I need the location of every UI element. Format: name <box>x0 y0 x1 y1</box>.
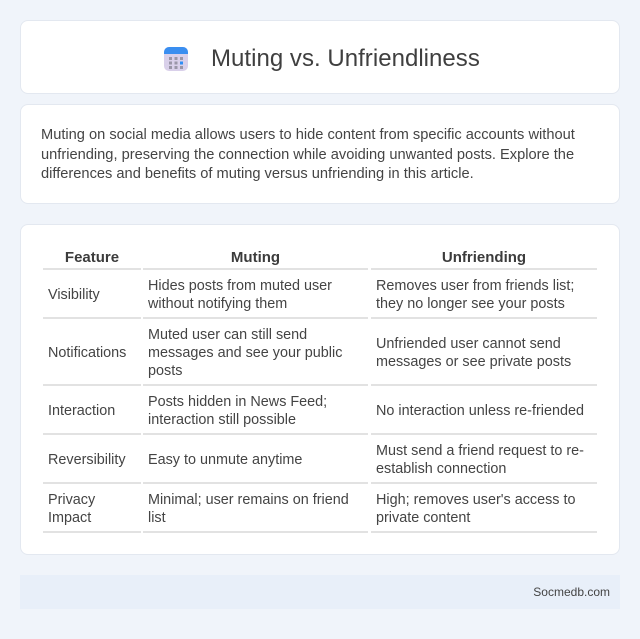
footer <box>20 575 620 609</box>
row: notifications: messages or see private posts <box>376 354 571 370</box>
row: notifications: posts <box>148 363 182 379</box>
intro text: unfriending, preserving the connection while avoiding unwanted posts. Explore the <box>41 146 574 162</box>
row: reversibility: establish connection <box>376 461 506 477</box>
panel: comparison table <box>20 224 620 555</box>
row: privacy impact: Minimal; user remains on friend <box>148 492 349 508</box>
table header: Unfriending <box>442 249 526 266</box>
table header <box>65 249 526 266</box>
row: notifications <box>43 317 597 379</box>
table header: Muting <box>231 249 280 266</box>
row: interaction: Posts hidden in News Feed; <box>148 394 327 410</box>
panel: title card <box>20 20 620 94</box>
row: notifications: Unfriended user cannot send <box>376 336 561 352</box>
row: privacy impact <box>43 482 597 533</box>
row: visibility: without notifying them <box>148 296 287 312</box>
row: visibility: Removes user from friends list; <box>376 278 574 294</box>
row: visibility: they no longer see your posts <box>376 296 565 312</box>
row: notifications: messages and see your public <box>148 345 342 361</box>
title: Muting vs. Unfriendliness <box>211 45 480 72</box>
intro text <box>41 127 575 182</box>
row: privacy impact: list <box>148 510 166 526</box>
intro text: Muting on social media allows users to hide content from specific accounts without <box>41 127 575 143</box>
row: interaction: Interaction <box>48 403 115 419</box>
row: visibility: Hides posts from muted user <box>148 278 332 294</box>
row: interaction <box>43 384 597 428</box>
intro text: differences and benefits of muting versus unfriending in this article. <box>41 166 474 182</box>
row: visibility: Visibility <box>48 287 100 303</box>
row: interaction: interaction still possible <box>148 412 296 428</box>
panel: introduction <box>20 104 620 204</box>
table header: Feature <box>65 249 119 266</box>
footer text: Socmedb.com <box>533 585 610 599</box>
row: reversibility: Must send a friend request to re- <box>376 443 584 459</box>
row: privacy impact: Privacy <box>48 492 95 508</box>
row: reversibility <box>43 433 597 477</box>
icon: calendar <box>164 47 188 71</box>
row: visibility <box>43 268 597 312</box>
row: reversibility: Easy to unmute anytime <box>148 452 302 468</box>
row: notifications: Notifications <box>48 345 126 361</box>
row: interaction: No interaction unless re-friended <box>376 403 584 419</box>
row: privacy impact: Impact <box>48 510 91 526</box>
row: reversibility: Reversibility <box>48 452 126 468</box>
row: privacy impact: High; removes user's access to <box>376 492 576 508</box>
row: notifications: Muted user can still send <box>148 327 307 343</box>
row: privacy impact: private content <box>376 510 470 526</box>
